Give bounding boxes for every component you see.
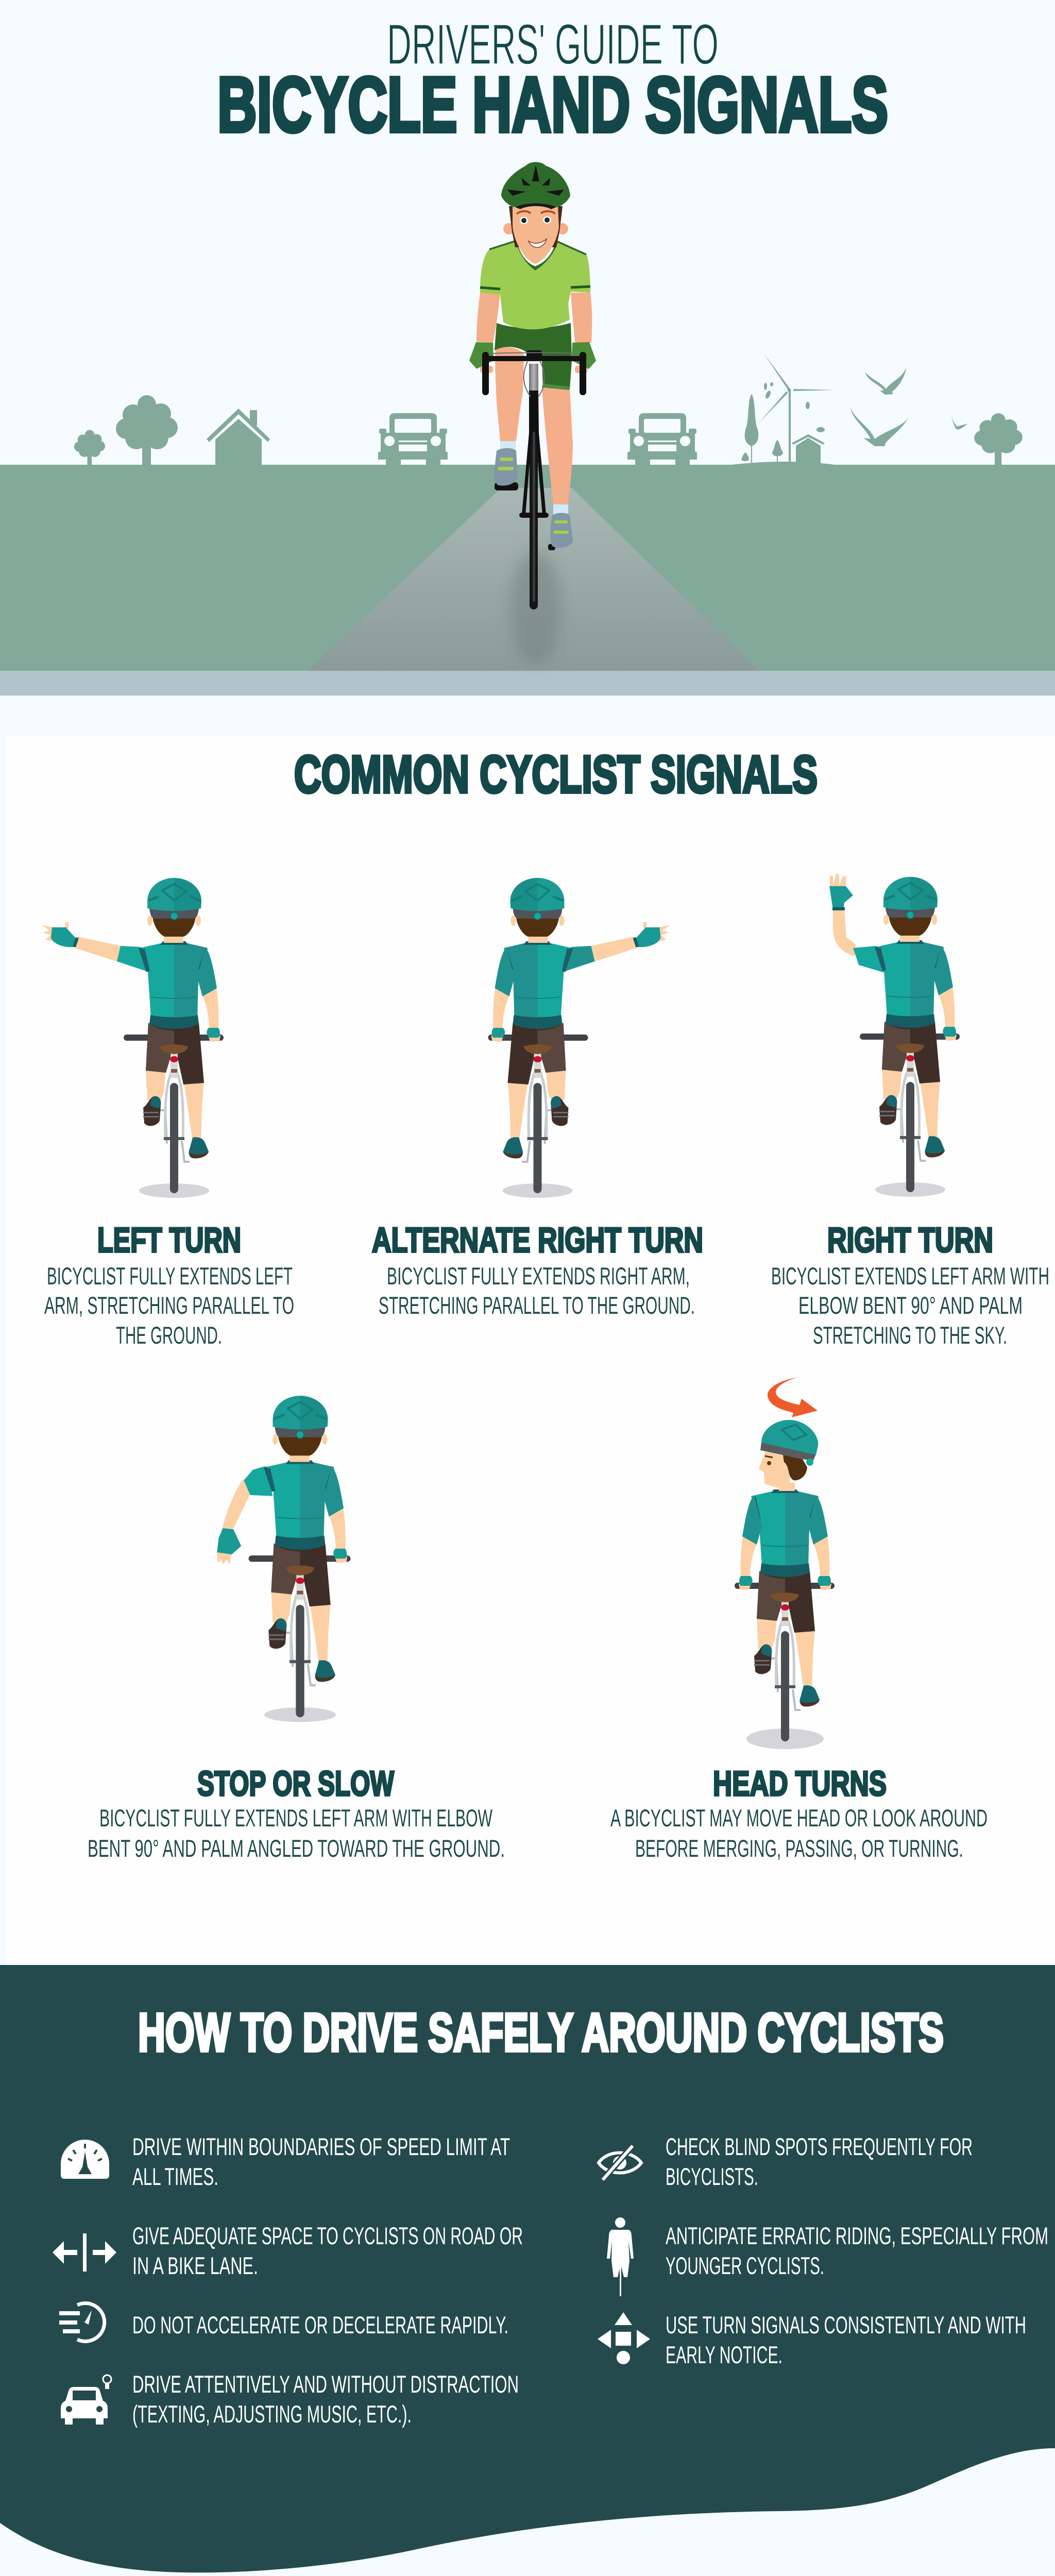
tip: erratic riding: [666, 2222, 1048, 2279]
bird large upper: [865, 367, 907, 395]
road: [308, 488, 759, 671]
label: head turns: [610, 1764, 988, 1862]
hero header: [217, 13, 888, 148]
label: stop or slow: BICYCLIST FULLY EXTENDS LEFT ARM WITH ELBOW: [99, 1804, 492, 1832]
icon: turn signals: [598, 2312, 650, 2364]
label: head turns: HEAD TURNS: [713, 1764, 887, 1803]
figure: stop or slow: [216, 1396, 350, 1722]
label: stop or slow: [88, 1764, 505, 1862]
icon: speedometer: [61, 2140, 109, 2179]
right tree: [974, 413, 1023, 465]
icon: space arrows: [53, 2233, 116, 2272]
hero cyclist: [469, 162, 596, 609]
hero scene: [0, 353, 1055, 696]
ground: [0, 465, 1055, 671]
tip: speed limit: DRIVE WITHIN BOUNDARIES OF SPEED LIMIT AT: [132, 2133, 510, 2160]
tip: adequate space: IN A BIKE LANE.: [132, 2252, 258, 2279]
label: left turn: LEFT TURN: [97, 1221, 241, 1260]
tip: acceleration: DO NOT ACCELERATE OR DECELERATE RAPIDLY.: [132, 2311, 508, 2338]
label: left turn: BICYCLIST FULLY EXTENDS LEFT: [47, 1262, 293, 1290]
tip: blind spots: [666, 2133, 973, 2190]
label: alternate right turn: STRETCHING PARALLEL TO THE GROUND.: [379, 1292, 695, 1319]
icon: blind spot eye: [599, 2146, 641, 2180]
label: stop or slow: STOP OR SLOW: [197, 1764, 395, 1803]
icon: cyclist silhouette: [607, 2217, 634, 2296]
icon: acceleration gauge: [59, 2303, 105, 2341]
label: alternate right turn: [372, 1221, 703, 1319]
label: alternate right turn: BICYCLIST FULLY EXTENDS RIGHT ARM,: [387, 1262, 690, 1290]
figure: head turns: [735, 1420, 835, 1749]
tip: attentive driving: [132, 2370, 519, 2428]
label: left turn: [44, 1221, 294, 1349]
label: stop or slow: BENT 90° AND PALM ANGLED TOWARD THE GROUND.: [88, 1835, 505, 1862]
label: left turn: THE GROUND.: [116, 1321, 222, 1349]
tip: speed limit: [132, 2133, 510, 2190]
tip: adequate space: [132, 2222, 523, 2279]
figure: right turn: [829, 874, 960, 1197]
right car: [627, 413, 697, 466]
road strip: [0, 671, 1055, 696]
tip: blind spots: BICYCLISTS.: [666, 2163, 758, 2190]
label: right turn: [771, 1221, 1049, 1349]
tip: erratic riding: YOUNGER CYCLISTS.: [666, 2252, 824, 2279]
road shadow: [510, 551, 561, 665]
large tree: [116, 395, 178, 466]
bird large lower: [850, 407, 909, 446]
section heading: COMMON CYCLIST SIGNALS: [294, 745, 818, 804]
panel: common cyclist signals: [6, 736, 1055, 1965]
label: right turn: RIGHT TURN: [827, 1221, 993, 1260]
wind turbine and small buildings: [731, 353, 835, 465]
bird small: [951, 416, 968, 430]
tip: attentive driving: DRIVE ATTENTIVELY AND WITHOUT DISTRACTION: [132, 2370, 519, 2398]
tip: turn signals: EARLY NOTICE.: [666, 2341, 782, 2368]
tip: turn signals: [666, 2311, 1026, 2368]
house: [207, 409, 270, 465]
icon: orange turn arrow: [768, 1377, 818, 1417]
figure: alternate right turn: [488, 878, 670, 1198]
tip: attentive driving: (TEXTING, ADJUSTING MUSIC, ETC.).: [132, 2400, 412, 2428]
panel: how to drive safely: [0, 1965, 1055, 2572]
tip: speed limit: ALL TIMES.: [132, 2163, 218, 2190]
icon: car with bulb: [61, 2375, 111, 2425]
label: left turn: ARM, STRETCHING PARALLEL TO: [44, 1292, 294, 1319]
tip: adequate space: GIVE ADEQUATE SPACE TO CYCLISTS ON ROAD OR: [132, 2222, 523, 2249]
left car: [378, 413, 448, 466]
small tree: [74, 430, 105, 465]
title line one: DRIVERS' GUIDE TO: [387, 13, 719, 76]
label: alternate right turn: ALTERNATE RIGHT TURN: [372, 1221, 703, 1260]
figure: left turn: [42, 878, 224, 1198]
